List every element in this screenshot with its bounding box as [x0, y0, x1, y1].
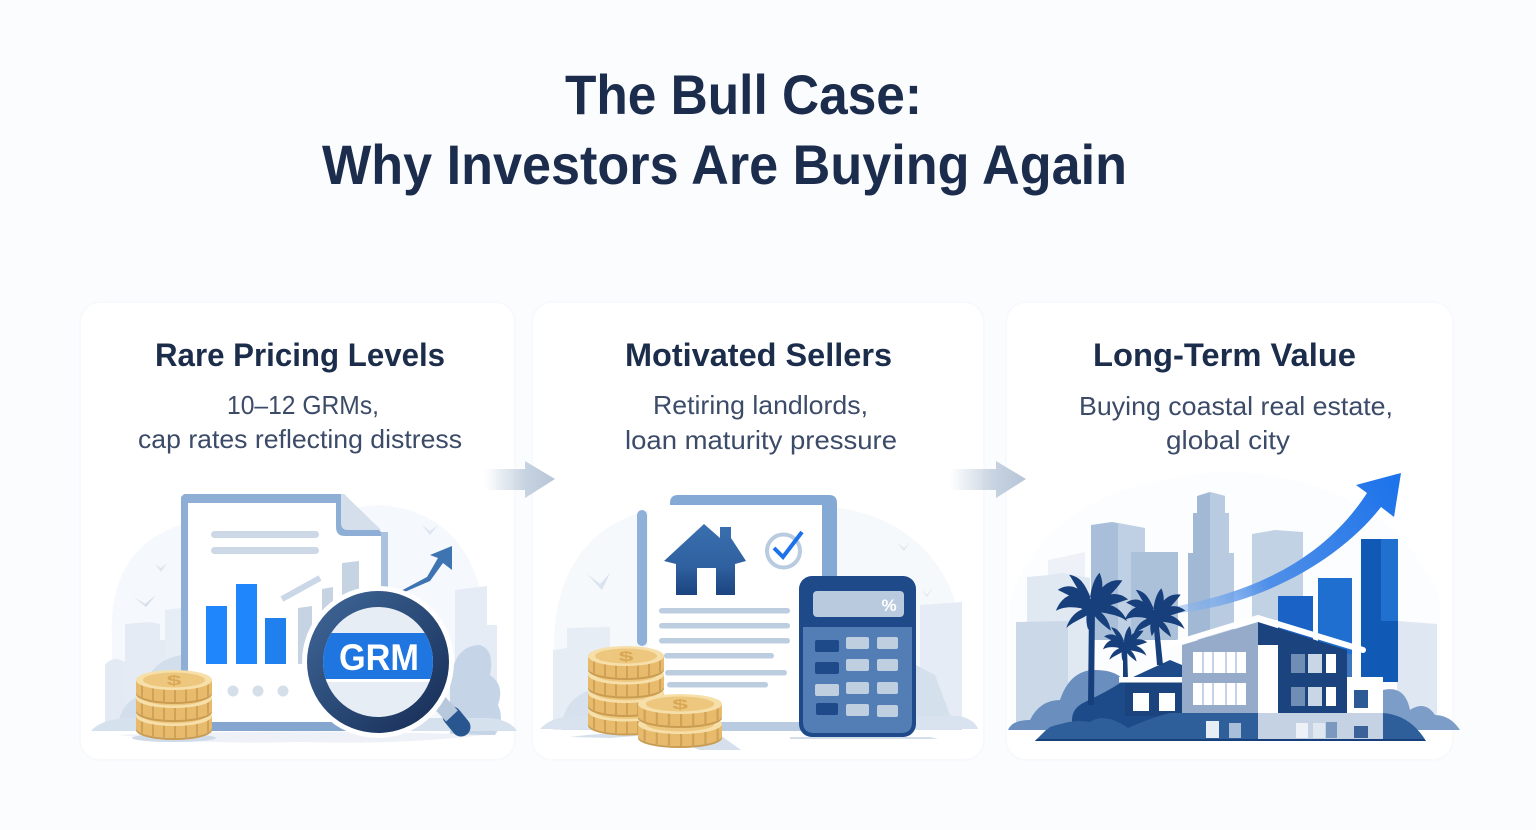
- icon: coin stacks 2: $: [672, 696, 689, 712]
- icon: magnifying glass GRM: [302, 586, 461, 738]
- text: sellers description: loan maturity pressure: [625, 425, 897, 455]
- text: pricing description: 10–12 GRMs,: [227, 390, 379, 420]
- heading: rare pricing levels: Rare Pricing Levels: [155, 337, 445, 373]
- bar chart: rising bars: [1278, 539, 1398, 682]
- text: pricing description: [138, 390, 462, 454]
- icon: loan document: [637, 495, 837, 731]
- text: pricing description: cap rates reflecting distress: [138, 424, 462, 454]
- icon: coin stack 1: $: [167, 673, 182, 688]
- icon: magnifying glass GRM: GRM: [339, 637, 419, 678]
- illustration backdrop: skyline 2: [540, 508, 978, 730]
- title: [322, 63, 1127, 196]
- icon: coin stack 1: [132, 670, 216, 742]
- illustration: palm trees: [1056, 573, 1185, 705]
- panel: rare pricing levels: [91, 342, 517, 742]
- title: Why Investors Are Buying Again: [322, 133, 1127, 196]
- panel: long-term value: [1006, 302, 1460, 760]
- heading: motivated sellers: Motivated Sellers: [625, 337, 892, 373]
- icon: calculator: %: [881, 596, 897, 615]
- heading: long-term value: Long-Term Value: [1093, 337, 1356, 373]
- icon: coin stacks 2: $: [619, 649, 634, 664]
- text: sellers description: Retiring landlords,: [653, 390, 868, 420]
- text: value description: Buying coastal real estate,: [1079, 391, 1393, 421]
- arrow: second to third panel: [950, 461, 1026, 498]
- icon: large growth arrow: [1178, 473, 1401, 613]
- icon: document with chart: [181, 494, 391, 731]
- icon: check mark: [767, 532, 802, 568]
- card background 3: [1006, 302, 1453, 760]
- text: value description: global city: [1166, 425, 1290, 455]
- illustration backdrop: skyline 1: [91, 505, 517, 743]
- text: sellers description: [625, 390, 897, 455]
- arrow: first to second panel: [485, 461, 555, 498]
- card background 2: [532, 302, 984, 760]
- text: value description: [1079, 391, 1393, 455]
- illustration: hedges: [1008, 660, 1460, 735]
- illustration: city skyline: [1010, 472, 1440, 730]
- icon: calculator: [790, 576, 938, 739]
- illustration: coastal house: [1035, 618, 1426, 741]
- icon: house: [664, 524, 746, 595]
- title: The Bull Case:: [565, 63, 922, 126]
- card background 1: [80, 302, 515, 760]
- icon: small growth arrow: [397, 546, 452, 594]
- panel: motivated sellers: [532, 302, 984, 760]
- icon: coin stacks 2: [570, 646, 741, 750]
